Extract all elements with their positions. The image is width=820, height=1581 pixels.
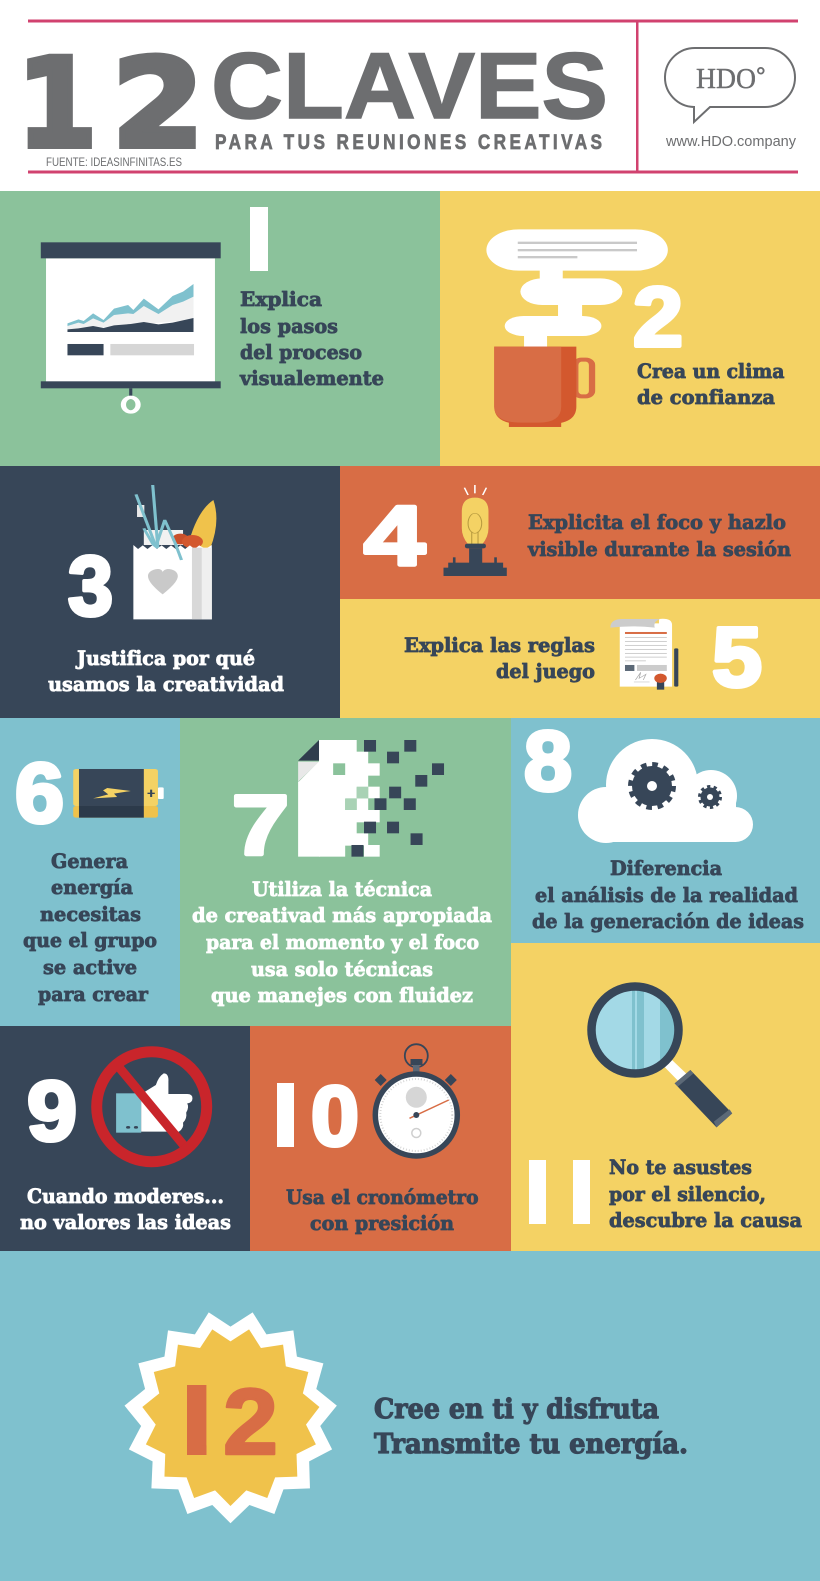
panel 2 text	[637, 359, 785, 409]
number 10: 1	[259, 1071, 306, 1165]
panel 3 background	[0, 466, 340, 718]
panel 3 text	[48, 646, 284, 696]
panel 10 background	[250, 1026, 511, 1251]
panel 7 text: para el momento y el foco	[206, 930, 479, 954]
panel 4 text: Explicita el foco y hazlo	[528, 510, 786, 534]
number 3: 3	[68, 539, 113, 633]
panel 1 text: Explica	[240, 287, 322, 311]
panel 1 text: del proceso	[240, 340, 362, 364]
panel 8: analysis vs ideas	[511, 714, 820, 943]
number 1: 1	[232, 195, 279, 289]
panel 2 text: Crea un clima	[637, 359, 785, 383]
HDO speech bubble logo	[665, 48, 795, 122]
panel 7: creativity technique	[180, 718, 511, 1026]
panel 8 text	[532, 856, 804, 933]
panel 7 text: usa solo técnicas	[251, 957, 433, 981]
panel 8 background	[511, 718, 820, 943]
panel 9 text	[20, 1184, 231, 1234]
number 12	[187, 1385, 276, 1456]
source note: FUENTE: IDEASINFINITAS.ES	[46, 157, 182, 169]
panel 9 background	[0, 1026, 250, 1251]
panel 3 text: Justifica por qué	[75, 646, 255, 670]
panel 6 text: energía	[51, 875, 133, 899]
panel 1 text: los pasos	[240, 314, 338, 338]
number 11: 1	[555, 1148, 602, 1242]
icon: battery	[73, 769, 164, 818]
panel 7 text: que manejes con fluidez	[211, 983, 473, 1007]
panel 2 background	[440, 191, 820, 466]
panel 1: visual process	[0, 191, 440, 466]
panel 4 text	[527, 510, 791, 561]
website: www.HDO.company	[665, 133, 796, 150]
icon: light bulb	[444, 485, 507, 576]
panel 10 text: con presición	[310, 1211, 454, 1235]
panel 11 text: descubre la causa	[609, 1208, 802, 1232]
header	[17, 20, 798, 175]
panel 1 background	[0, 191, 440, 466]
icon: stopwatch	[375, 1044, 457, 1156]
panel 6 text: para crear	[38, 982, 148, 1006]
panel 6 text: necesitas	[40, 902, 141, 926]
number 7: 7	[232, 778, 289, 872]
title number 12: 1	[17, 33, 97, 175]
icon: coffee cup with steam	[486, 229, 668, 427]
panel 12: believe in yourself	[0, 1251, 820, 1581]
number 10	[277, 1083, 358, 1148]
icon: starburst badge	[125, 1312, 337, 1523]
icon: contract document	[610, 619, 678, 690]
panel 5 text: del juego	[496, 659, 595, 683]
panel 9 text: Cuando moderes...	[27, 1184, 224, 1208]
panel 7 background	[180, 718, 511, 1026]
panel 7 text: de creativad más apropiada	[192, 903, 492, 927]
panel 6: generate energy	[0, 718, 180, 1026]
number 5: 5	[712, 610, 762, 704]
number 1	[250, 207, 268, 271]
panel 6 text	[23, 849, 157, 1006]
panel 12 text: Cree en ti y disfruta	[374, 1394, 659, 1425]
number 10: 0	[311, 1069, 359, 1163]
panel 2 text: de confianza	[637, 385, 775, 409]
panel 8 text: Diferencia	[610, 856, 722, 880]
panel 1 text	[239, 287, 384, 390]
number 12: 1	[167, 1370, 219, 1475]
icon: shopping bag	[133, 485, 216, 619]
panel 3: justify creativity	[0, 466, 340, 718]
panel 5 text	[404, 633, 595, 683]
panel 1 text: visualemente	[239, 366, 384, 390]
number 12: 2	[223, 1369, 278, 1474]
panel 10 text	[286, 1185, 478, 1235]
title CLAVES: CLAVES	[211, 33, 608, 138]
number 8: 8	[524, 714, 572, 808]
panel 4 background	[340, 466, 820, 599]
panel 5 text: Explica las reglas	[404, 633, 595, 657]
panel 10 text: Usa el cronómetro	[286, 1185, 478, 1209]
number 2: 2	[633, 270, 683, 364]
title number 12: 2	[112, 33, 204, 175]
panel 8 text: el análisis de la realidad	[535, 883, 798, 907]
panel 11 background	[511, 943, 820, 1251]
panel 11 text: No te asustes	[609, 1155, 752, 1179]
panel 8 text: de la generación de ideas	[532, 909, 804, 933]
panel 4 text: visible durante la sesión	[527, 537, 791, 561]
panel 3 text: usamos la creatividad	[48, 672, 284, 696]
icon: magnifying glass	[592, 985, 732, 1127]
HDO speech bubble logo: °	[756, 63, 766, 90]
icon: projection screen with chart	[41, 242, 221, 412]
subtitle: PARA TUS REUNIONES CREATIVAS	[215, 132, 602, 154]
panel 6 text: Genera	[51, 849, 128, 873]
panel 11: silence	[511, 943, 820, 1251]
header frame lines	[28, 20, 798, 174]
HDO speech bubble logo: HDO	[696, 63, 756, 95]
panel 5: rules of the game	[340, 599, 820, 718]
title number 12	[17, 33, 204, 175]
panel 9 text: no valores las ideas	[20, 1210, 231, 1234]
panel 9: do not judge ideas	[0, 1026, 250, 1251]
panel 10: use the stopwatch	[250, 1026, 511, 1251]
panel 6 text: se active	[43, 955, 137, 979]
icon: dissolving document	[298, 740, 444, 857]
number 4: 4	[364, 489, 425, 583]
panel 11 text	[609, 1155, 802, 1232]
panel 4: visible focus	[340, 466, 820, 599]
panel 12 text	[374, 1394, 688, 1460]
number 9: 9	[27, 1064, 77, 1158]
panel 12 text: Transmite tu energía.	[374, 1429, 688, 1460]
number 11	[529, 1160, 590, 1224]
panel 11 text: por el silencio,	[609, 1182, 766, 1206]
number 6: 6	[15, 746, 64, 840]
panel 2: climate of trust	[440, 191, 820, 466]
panel 6 background	[0, 718, 180, 1026]
icon: forbidden thumbs up	[97, 1052, 207, 1162]
panel 6 text: que el grupo	[23, 928, 157, 952]
panel 7 text: Utiliza la técnica	[252, 877, 432, 901]
panel 5 background	[340, 599, 820, 718]
panel 7 text	[192, 877, 492, 1007]
icon: cloud with gears	[578, 739, 753, 843]
panel 12 background	[0, 1251, 820, 1581]
number 11: 1	[511, 1148, 558, 1242]
